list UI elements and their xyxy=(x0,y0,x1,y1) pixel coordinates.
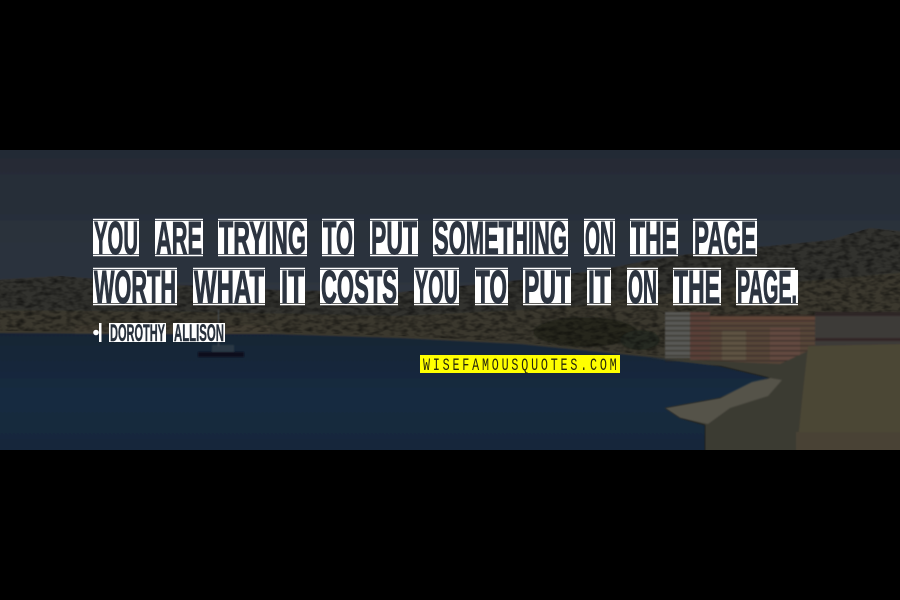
promenade xyxy=(665,378,782,424)
water xyxy=(0,333,770,460)
trees xyxy=(533,317,637,347)
quote line 1: YOU xyxy=(94,212,138,264)
hillside city xyxy=(0,228,900,316)
boat xyxy=(198,310,244,357)
icon: bullet xyxy=(93,323,102,342)
fortress xyxy=(799,344,900,433)
sky xyxy=(0,150,900,293)
quote line 2: PUT xyxy=(524,261,570,313)
author name: DOROTHY xyxy=(110,320,165,347)
quote line 1 xyxy=(93,212,757,264)
quote line 1: SOMETHING xyxy=(434,212,567,264)
quote line 2: YOU xyxy=(415,261,458,313)
watermark badge: WISEFAMOUSQUOTES.COM xyxy=(423,355,617,376)
background photo: Bay of Naples xyxy=(0,140,900,460)
quote line 1: TRYING xyxy=(219,212,306,264)
attribution xyxy=(93,320,225,347)
quote line 1: TO xyxy=(323,212,353,264)
quote line 2: ON xyxy=(628,261,657,313)
quote: PAGE xyxy=(694,212,756,264)
quote line 2: IT xyxy=(588,261,610,313)
lower waterfront land xyxy=(658,352,808,450)
quote line 1: ARE xyxy=(156,212,202,264)
quote line 2: WHAT xyxy=(194,261,264,313)
quote line 2 xyxy=(93,261,798,313)
quote line 1: ON xyxy=(585,212,614,264)
quote line 2: IT xyxy=(281,261,304,313)
text: PAGE. xyxy=(737,261,797,313)
waterfront hotels xyxy=(665,312,900,364)
quote line 1: THE xyxy=(631,212,677,264)
quote line 2: TO xyxy=(476,261,507,313)
quote line 2: COSTS xyxy=(321,261,397,313)
land texture xyxy=(0,228,900,356)
quote line 1: PUT xyxy=(371,212,417,264)
text: ALLISON xyxy=(174,320,224,347)
quote xyxy=(93,212,798,313)
shoreline buildings strip xyxy=(75,325,270,335)
quote line 2: THE xyxy=(674,261,720,313)
quote line 2: WORTH xyxy=(94,261,176,313)
